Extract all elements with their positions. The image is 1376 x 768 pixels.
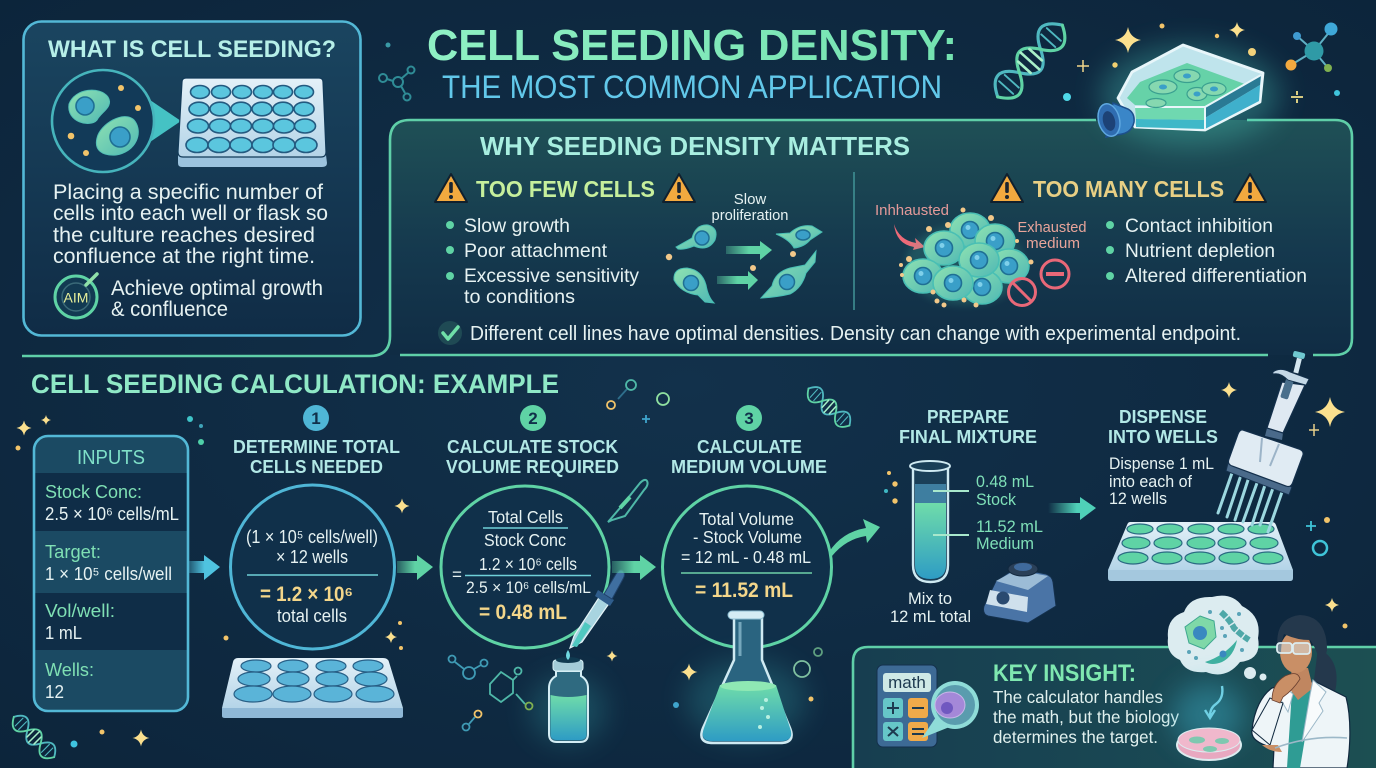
heading: prepare final mixture: FINAL MIXTURE xyxy=(899,426,1037,447)
illustration: scientist xyxy=(1252,615,1350,768)
text: dispense instructions: into each of xyxy=(1109,473,1192,491)
list: too few effects: to conditions xyxy=(464,286,575,308)
icon: minus sign xyxy=(1041,260,1069,288)
arrow: mixture to dispense xyxy=(1048,497,1096,520)
labels: volumes: Stock xyxy=(976,490,1016,509)
heading: determine total cells xyxy=(233,436,400,477)
list: too few effects xyxy=(446,215,639,308)
title xyxy=(427,21,957,105)
heading: calculate stock volume: VOLUME REQUIRED xyxy=(446,456,619,477)
arrow: inputs to step 1 xyxy=(189,555,220,580)
heading: prepare final mixture xyxy=(899,406,1037,447)
list: too few effects: Excessive sensitivity xyxy=(464,265,639,287)
badge: 2: 2 xyxy=(528,409,538,428)
badge: 1 xyxy=(303,405,329,431)
list: too many effects: Altered differentiation xyxy=(1125,265,1307,287)
icon: molecule top right xyxy=(1286,22,1338,72)
panel: what is cell seeding xyxy=(24,22,360,336)
heading: determine total cells: CELLS NEEDED xyxy=(250,456,383,477)
decoration: sparkles around flask xyxy=(673,648,822,708)
heading: too few cells: TOO FEW CELLS xyxy=(476,176,655,202)
label: exhausted medium xyxy=(1018,219,1086,252)
heading: calculate stock volume xyxy=(446,436,619,477)
formula circle: 1.2 × 10⁶ cells xyxy=(479,554,577,574)
input: target xyxy=(45,541,172,584)
icon: 12-well plate xyxy=(222,658,403,718)
icon: 24-well plate xyxy=(178,78,327,167)
icon: thought bubble xyxy=(1168,596,1266,680)
decoration: molecule near title xyxy=(379,42,414,100)
heading: prepare final mixture: PREPARE xyxy=(927,406,1009,427)
list: too few effects: Poor attachment xyxy=(464,240,608,262)
section: too many cells xyxy=(875,174,1307,308)
formula circle xyxy=(662,486,832,648)
subtitle: THE MOST COMMON APPLICATION xyxy=(442,69,942,105)
label: exhausted medium: Exhausted xyxy=(1018,219,1086,236)
decoration: dots by tube xyxy=(884,471,898,504)
heading: calculate medium volume: MEDIUM VOLUME xyxy=(671,456,827,477)
arrow: red pointer xyxy=(894,224,925,250)
text: dispense instructions: Dispense 1 mL xyxy=(1109,455,1214,473)
input: wells xyxy=(45,659,94,702)
labels: volumes: Medium xyxy=(976,534,1034,553)
heading: calculate medium volume xyxy=(671,436,827,477)
heading: too many cells: TOO MANY CELLS xyxy=(1033,176,1224,202)
illustration: sparse cells with arrows xyxy=(666,225,822,303)
formula circle: - Stock Volume xyxy=(693,527,802,547)
icon: warning right xyxy=(1234,174,1266,202)
label: mix to 12 ml total xyxy=(890,589,971,626)
step 3 xyxy=(662,383,855,743)
panel: inputs xyxy=(34,436,188,711)
step 2 xyxy=(441,380,669,744)
formula circle: 2.5 × 10⁶ cells/mL xyxy=(466,578,591,597)
arrow: step 1 to step 2 xyxy=(397,555,433,580)
formula circle: Stock Conc xyxy=(484,530,566,550)
text: aim statement: Achieve optimal growth xyxy=(111,277,323,300)
icon: small dna xyxy=(803,383,855,431)
formula circle xyxy=(230,485,394,649)
label: mix to 12 ml total: Mix to xyxy=(908,589,952,608)
icon: dna top xyxy=(987,16,1073,106)
icon: aim target: AIM xyxy=(64,290,88,306)
input: stock concentration: 2.5 × 10⁶ cells/mL xyxy=(45,503,179,524)
icon: prohibited sign xyxy=(1008,278,1036,306)
text: dispense instructions xyxy=(1109,455,1214,508)
label: slow proliferation: proliferation xyxy=(712,207,788,224)
glow behind dish xyxy=(1172,683,1244,747)
text: key insight body: the math, but the biology xyxy=(993,707,1179,727)
labels: volumes: 0.48 mL xyxy=(976,472,1034,491)
decoration: sparkles and dots around inputs xyxy=(8,415,410,763)
decoration: sparkles around flask xyxy=(1063,22,1340,103)
section: too few cells xyxy=(435,174,822,308)
illustration: crowded cell cluster xyxy=(899,208,1034,308)
formula circle: = 1.2 × 10⁶ xyxy=(260,583,353,606)
icon: warning left xyxy=(435,174,467,202)
icon: check mark xyxy=(438,321,462,345)
step: prepare final mixture xyxy=(884,406,1056,626)
heading: dispense into wells: INTO WELLS xyxy=(1108,426,1218,447)
arrow: step 2 to step 3 xyxy=(612,555,656,580)
heading: key insight: KEY INSIGHT: xyxy=(993,660,1136,687)
section heading: calculation example: CELL SEEDING CALCULATION: EXAMPLE xyxy=(31,369,559,399)
icon: magnified cells circle xyxy=(52,70,181,172)
text: key insight body: The calculator handles xyxy=(993,687,1163,707)
formula circle: Total Cells xyxy=(488,507,563,527)
text: dispense instructions: 12 wells xyxy=(1109,490,1167,508)
text: aim statement xyxy=(111,277,323,321)
list: too many effects: Contact inhibition xyxy=(1125,215,1273,237)
icon: calculator: math xyxy=(888,673,926,692)
input: target: 1 × 10⁵ cells/well xyxy=(45,563,172,584)
formula circle: × 12 wells xyxy=(276,547,348,567)
heading: calculate stock volume: CALCULATE STOCK xyxy=(447,436,619,457)
icon: arrow to dish xyxy=(1205,686,1222,718)
icon: petri dish xyxy=(1177,728,1241,760)
icon: warning right xyxy=(663,174,695,202)
input: wells: Wells: xyxy=(45,659,94,680)
formula circle: total cells xyxy=(277,606,347,626)
badge: 2 xyxy=(520,405,546,431)
text: aim statement: & confluence xyxy=(111,298,228,321)
text: definition xyxy=(53,181,328,268)
heading: inputs: INPUTS xyxy=(77,447,145,469)
icon: vial xyxy=(530,650,606,744)
text: definition: Placing a specific number of xyxy=(53,181,323,204)
formula circle: (1 × 10⁵ cells/well) xyxy=(246,527,378,547)
icon: dropper xyxy=(570,570,624,648)
formula circle: = 0.48 mL xyxy=(479,601,567,624)
icon: cell speech bubble xyxy=(922,681,979,738)
labels: volumes xyxy=(976,472,1043,553)
input: wells: 12 xyxy=(45,681,64,702)
icon: small pipette xyxy=(608,480,648,522)
formula circle xyxy=(441,486,609,648)
title: CELL SEEDING DENSITY: xyxy=(427,21,957,70)
step 1 xyxy=(222,405,403,718)
note: different cell lines: Different cell lines have optimal densities. Density can change with experimental endpoint. xyxy=(470,323,1241,345)
icon: test tube xyxy=(910,461,969,582)
formula circle: = 12 mL - 0.48 mL xyxy=(681,547,811,567)
sparkle near vial xyxy=(606,650,618,662)
panel heading: what is cell seeding: WHAT IS CELL SEEDING? xyxy=(48,36,336,63)
icon: multichannel pipette xyxy=(1218,351,1309,532)
heading: calculate medium volume: CALCULATE xyxy=(697,436,802,457)
labels: volumes: 11.52 mL xyxy=(976,517,1043,536)
decoration: sparkles right xyxy=(1221,382,1348,628)
list: too few effects: Slow growth xyxy=(464,215,570,237)
icon: calculator xyxy=(877,665,937,747)
text: definition: the culture reaches desired xyxy=(53,224,315,247)
panel: why seeding density matters xyxy=(22,120,1352,356)
icon: warning left xyxy=(991,174,1023,202)
input: volume per well xyxy=(45,600,115,643)
text: key insight body xyxy=(993,687,1179,747)
badge: 3: 3 xyxy=(744,409,754,428)
formula circle: = 11.52 mL xyxy=(695,579,793,602)
heading: dispense into wells: DISPENSE xyxy=(1119,406,1207,427)
step: dispense into wells xyxy=(1108,351,1348,628)
icon: erlenmeyer flask xyxy=(686,611,806,743)
formula circle: = xyxy=(452,565,462,584)
icon: aim target xyxy=(55,274,97,318)
badge: 3 xyxy=(736,405,762,431)
text: definition: confluence at the right time. xyxy=(53,245,315,268)
badge: 1: 1 xyxy=(311,409,321,428)
icon: 15-well plate xyxy=(1108,522,1293,581)
icon: vortex mixer xyxy=(984,562,1056,623)
label: slow proliferation: Slow xyxy=(734,191,766,208)
formula circle: Total Volume xyxy=(699,509,794,529)
label: mix to 12 ml total: 12 mL total xyxy=(890,607,971,626)
icon: culture flask xyxy=(1095,45,1280,145)
input: volume per well: Vol/well: xyxy=(45,600,115,621)
arrow: curved to final mixture xyxy=(829,519,880,556)
input: stock concentration: Stock Conc: xyxy=(45,481,142,502)
decoration: molecules around step 2 xyxy=(448,380,669,730)
label: inhhausted: Inhhausted xyxy=(875,202,949,219)
panel: key insight xyxy=(853,596,1376,768)
list: too many effects: Nutrient depletion xyxy=(1125,240,1275,262)
input: volume per well: 1 mL xyxy=(45,622,82,643)
input: stock concentration xyxy=(45,481,179,524)
label: slow proliferation xyxy=(712,191,788,224)
label: exhausted medium: medium xyxy=(1026,235,1080,252)
text: key insight body: determines the target. xyxy=(993,727,1158,747)
text: definition: cells into each well or flask so xyxy=(53,202,328,225)
panel heading: why seeding density matters: WHY SEEDING DENSITY MATTERS xyxy=(480,133,910,161)
input: target: Target: xyxy=(45,541,101,562)
heading: determine total cells: DETERMINE TOTAL xyxy=(233,436,400,457)
heading: dispense into wells xyxy=(1108,406,1218,447)
list: too many effects xyxy=(1106,215,1307,287)
